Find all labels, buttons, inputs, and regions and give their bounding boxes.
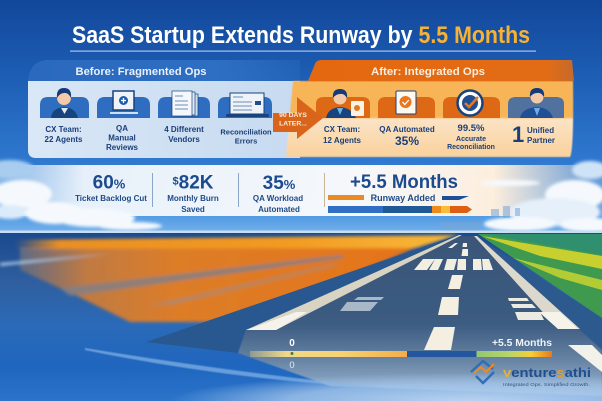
- centre dashes: [424, 243, 468, 350]
- metric: runway added: +5.5 Months: [350, 172, 458, 193]
- card: CX team 12 agents: CX Team:: [324, 125, 360, 134]
- progress scale: 0: [289, 360, 295, 371]
- card: QA automated 35%: QA Automated: [379, 125, 435, 134]
- progress scale: +5.5 Months: [492, 338, 552, 349]
- card: 4 different vendors: [158, 91, 210, 144]
- card: reconciliation errors: Errors: [235, 136, 257, 146]
- logo: venturesathi: venture sathi: [503, 365, 591, 380]
- metric: runway added: Runway Added: [371, 193, 435, 203]
- after header: [308, 60, 574, 81]
- ground: [0, 233, 602, 401]
- card: 1 unified partner: Unified: [527, 126, 554, 135]
- logo: venturesathi: Integrated Ops. Simplified Growth.: [503, 382, 590, 387]
- card: reconciliation errors: Reconciliation: [220, 128, 272, 136]
- card: CX team 12 agents: [316, 89, 370, 145]
- card: CX team 22 agents: 22 Agents: [45, 135, 83, 144]
- metric: ticket backlog: [75, 175, 147, 202]
- road surface: [238, 236, 602, 396]
- card: 99.5% accurate reconciliation: 99.5%: [458, 123, 485, 134]
- metric: monthly burn: [168, 175, 218, 212]
- card: QA automated 35%: [378, 91, 435, 148]
- card: CX team 12 agents: 12 Agents: [323, 136, 362, 145]
- card: QA manual reviews: [97, 91, 150, 152]
- card: reconciliation errors: [218, 93, 272, 146]
- sky background: [0, 0, 602, 236]
- card: 1 unified partner: Partner: [527, 136, 555, 145]
- card: QA manual reviews: Reviews: [106, 143, 139, 152]
- panel: after: [286, 60, 574, 157]
- card: 4 different vendors: Vendors: [168, 135, 200, 144]
- card: CX team 22 agents: [40, 88, 89, 144]
- after body: [286, 81, 573, 157]
- bottom light glow: [179, 376, 602, 401]
- before body: [28, 81, 300, 158]
- metric: monthly burn: $: [173, 176, 179, 188]
- green field: [478, 234, 602, 318]
- threshold marks: [414, 259, 493, 270]
- metric: monthly burn: Saved: [181, 205, 205, 214]
- logo: venturesathi: [471, 361, 591, 387]
- card: QA manual reviews: Manual: [108, 134, 136, 142]
- panel: before: [28, 60, 300, 158]
- dark verges: [146, 236, 460, 353]
- metric: ticket backlog: Ticket Backlog Cut: [75, 194, 147, 203]
- card: 1 unified partner: 1: [512, 122, 524, 147]
- card: QA manual reviews: QA: [116, 124, 128, 133]
- metric: ticket backlog: 60%: [93, 172, 126, 194]
- card: CX team 22 agents: CX Team:: [45, 125, 82, 134]
- card: QA automated 35%: 35%: [395, 134, 419, 148]
- orange field streaks: [0, 235, 458, 322]
- before header: Before: Fragmented Ops: [76, 66, 206, 78]
- metric: QA workload: 35%: [263, 173, 296, 194]
- horizon line: [0, 230, 602, 233]
- runway edge lines: [246, 235, 462, 330]
- card: 4 different vendors: 4 Different: [164, 125, 204, 134]
- card: 99.5% accurate reconciliation: Reconciliation: [447, 144, 495, 151]
- city skyline: [441, 206, 520, 231]
- metric: runway added: [328, 172, 472, 213]
- title: SaaS Startup Extends Runway by 5.5 Months: [72, 22, 530, 49]
- after header: After: Integrated Ops: [371, 66, 485, 78]
- card: 1 unified partner: [508, 88, 564, 147]
- progress scale: 0: [289, 338, 295, 349]
- card: 99.5% accurate reconciliation: Accurate: [456, 136, 486, 143]
- arrow: 90 days later: [273, 97, 323, 139]
- metric: QA workload: Automated: [258, 205, 300, 214]
- before header: [28, 60, 300, 81]
- arrow: 90 days later: 90 DAYS: [279, 112, 307, 119]
- clouds left: [0, 160, 162, 230]
- metrics band: [0, 165, 602, 216]
- progress scale: [250, 338, 552, 368]
- arrow: 90 days later: LATER...: [279, 120, 307, 128]
- runway: [146, 235, 602, 396]
- clouds right: [480, 161, 602, 232]
- metric: QA workload: [253, 176, 303, 212]
- metric: monthly burn: 82K: [179, 172, 214, 194]
- metric: monthly burn: Monthly Burn: [167, 194, 219, 203]
- light streak: [85, 348, 384, 388]
- card: 99.5% accurate reconciliation: [443, 90, 500, 151]
- metric: QA workload: QA Workload: [253, 194, 303, 203]
